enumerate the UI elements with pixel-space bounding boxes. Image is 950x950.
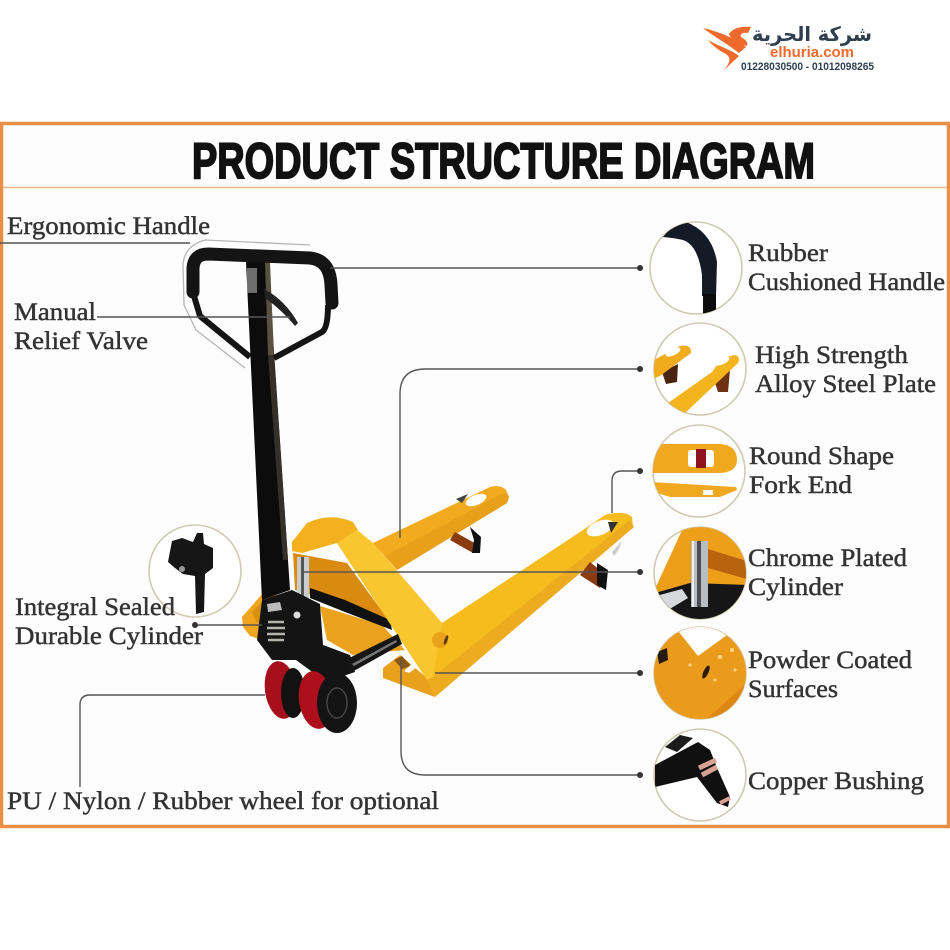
caption: Copper Bushing	[748, 768, 925, 795]
caption: Powder Coated	[748, 647, 913, 674]
pump spring	[267, 622, 285, 640]
fork base plate	[383, 655, 435, 697]
caption: Alloy Steel Plate	[755, 371, 936, 398]
caption: Rubber	[748, 240, 829, 267]
caption: High Strength	[755, 342, 909, 369]
company name in Arabic: شركة الحرية	[752, 22, 872, 46]
pallet truck illustration	[183, 240, 634, 733]
caption	[748, 545, 908, 601]
caption: Round Shape	[749, 443, 894, 470]
company logo	[703, 22, 874, 73]
inset: integral cylinder detail	[149, 525, 241, 617]
pump assembly	[257, 590, 355, 682]
far fork	[373, 486, 509, 570]
feature: high strength alloy steel plate	[650, 323, 936, 415]
detail circle	[650, 323, 746, 415]
far fork roller	[450, 532, 478, 553]
caption	[748, 240, 945, 296]
icon: orange wings	[703, 27, 751, 71]
relief lever	[264, 289, 298, 326]
top cover	[292, 517, 358, 553]
feature: powder coated surfaces	[653, 626, 912, 720]
rear wheel	[261, 659, 301, 721]
detail circle	[654, 729, 746, 821]
label: Manual Relief Valve	[14, 299, 148, 355]
label: Manual Relief Valve: Manual	[14, 299, 96, 326]
caption: Cushioned Handle	[748, 269, 945, 296]
diagram frame	[2, 124, 948, 826]
label: Integral Sealed Durable Cylinder: Durable Cylinder	[15, 623, 204, 650]
website: elhuria.com	[770, 44, 854, 61]
pole	[246, 262, 290, 600]
detail circle	[650, 425, 745, 517]
label: Integral Sealed Durable Cylinder	[15, 594, 204, 650]
caption: Surfaces	[748, 676, 838, 703]
detail circle	[654, 525, 750, 625]
front wheel hub	[317, 673, 357, 733]
near fork	[337, 513, 633, 697]
pole label plate	[247, 268, 257, 293]
front wheel tread	[295, 669, 337, 731]
lower chassis plate	[320, 606, 405, 655]
caption: Cylinder	[748, 574, 844, 601]
caption: Fork End	[749, 472, 853, 499]
caption	[748, 647, 913, 703]
feature: chrome plated cylinder	[654, 525, 908, 625]
label: Manual Relief Valve: Relief Valve	[14, 328, 148, 355]
feature: round shape fork end	[650, 425, 894, 517]
caption	[749, 443, 894, 499]
handle loop	[194, 296, 250, 357]
label: Ergonomic Handle: Ergonomic Handle	[7, 213, 210, 240]
rear base plate	[242, 593, 300, 640]
feature: copper bushing	[654, 729, 925, 821]
feature: rubber cushioned handle	[650, 222, 945, 318]
label: Integral Sealed Durable Cylinder: Integral Sealed	[15, 594, 176, 621]
caption: Chrome Plated	[748, 545, 908, 572]
black lift bar	[310, 588, 392, 630]
chrome cylinder	[297, 557, 309, 603]
detail circle	[653, 626, 747, 720]
steering link	[345, 634, 402, 672]
near fork roller	[580, 562, 606, 588]
phone numbers: 01228030500 - 01012098265	[741, 61, 874, 73]
handle grey outline	[183, 240, 310, 368]
label: wheel options: PU / Nylon / Rubber wheel for optional	[7, 788, 439, 815]
detail circle	[650, 222, 742, 318]
caption	[755, 342, 936, 398]
hydraulic body	[293, 553, 392, 625]
leader lines	[0, 243, 643, 787]
